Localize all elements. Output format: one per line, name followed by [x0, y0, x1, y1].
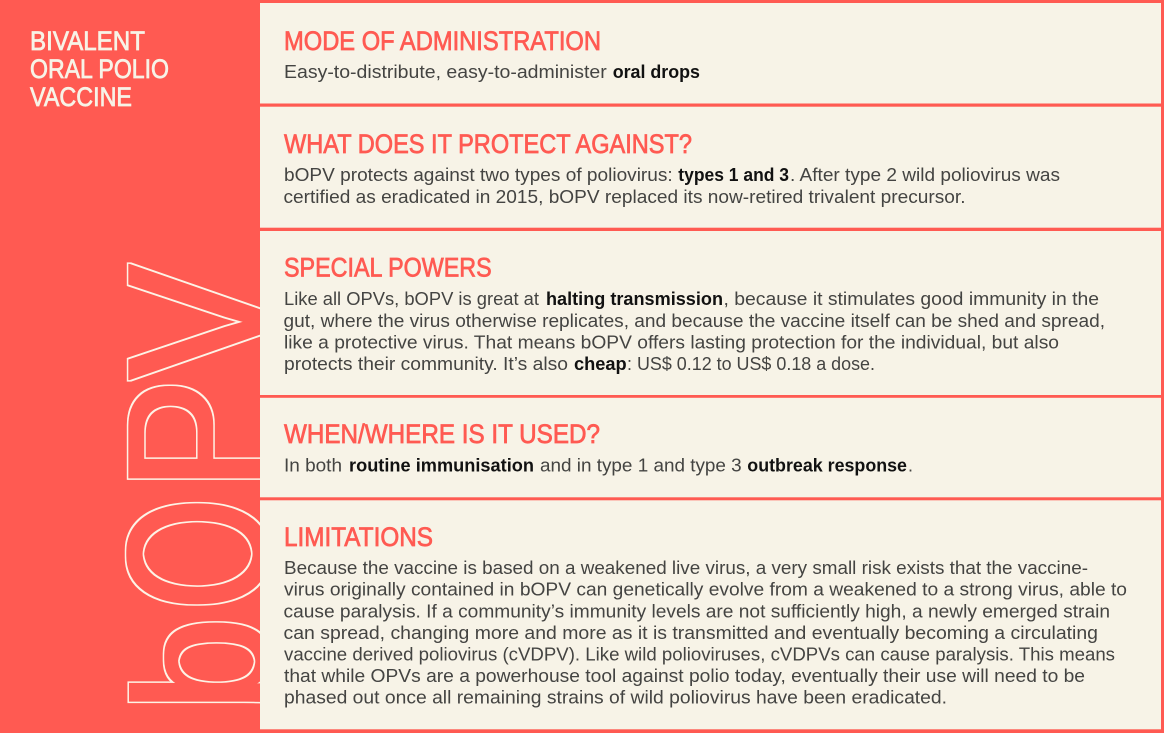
- heading: SPECIAL POWERS: [284, 253, 492, 283]
- text block: cheap: [574, 354, 627, 374]
- panel: mode of administration: [260, 3, 1161, 104]
- text block: Because the vaccine is based on a weakened live virus, a very small risk exists that the vaccine-: [284, 558, 1088, 578]
- text block: halting transmission: [546, 289, 723, 309]
- text block: cause paralysis. If a community’s immunity levels are not sufficiently high, a newly emerged strain: [284, 602, 1110, 622]
- text block: oral drops: [613, 62, 700, 82]
- text block: that while OPVs are a powerhouse tool against polio today, eventually their use will need to be: [284, 666, 1085, 686]
- large outlined rotated word: bOPV: b: [95, 618, 307, 711]
- panel: special powers: [260, 231, 1161, 395]
- text block: routine immunisation: [349, 456, 534, 476]
- title: bivalent oral polio vaccine: BIVALENT: [30, 26, 145, 56]
- text block: bOPV protects against two types of poliovirus:: [284, 165, 673, 185]
- text block: .: [908, 456, 913, 476]
- text block: : US$ 0.12 to US$ 0.18 a dose.: [627, 354, 875, 374]
- text block: outbreak response: [747, 456, 907, 476]
- text block: can spread, changing more and more as it is transmitted and eventually becoming a circulating: [284, 623, 1098, 643]
- heading: WHAT DOES IT PROTECT AGAINST?: [284, 129, 692, 159]
- large outlined rotated word: bOPV: P: [86, 379, 309, 490]
- text block: like a protective virus. That means bOPV offers lasting protection for the individual, but also: [284, 332, 1059, 352]
- text block: vaccine derived poliovirus (cVDPV). Like wild polioviruses, cVDPVs can cause paralysis. This means: [284, 645, 1115, 665]
- text block: [284, 558, 1127, 708]
- title: bivalent oral polio vaccine: ORAL POLIO: [30, 54, 169, 84]
- text block: and in type 1 and type 3: [540, 456, 742, 476]
- large outlined rotated word: bOPV: [85, 265, 309, 711]
- text block: gut, where the virus otherwise replicates, and because the vaccine itself can be shed and spread,: [284, 311, 1105, 331]
- text block: [284, 289, 1105, 374]
- heading: WHEN/WHERE IS IT USED?: [284, 419, 600, 449]
- panel: when/where is it used: [260, 398, 1161, 497]
- text block: types 1 and 3: [678, 165, 789, 185]
- text block: phased out once all remaining strains of wild poliovirus have been eradicated.: [284, 688, 947, 708]
- text block: virus originally contained in bOPV can genetically evolve from a weakened to a strong virus, able to: [284, 580, 1127, 600]
- heading: MODE OF ADMINISTRATION: [284, 26, 601, 56]
- text block: protects their community. It’s also: [284, 354, 568, 374]
- text block: Easy-to-distribute, easy-to-administer: [284, 62, 607, 82]
- heading: LIMITATIONS: [284, 522, 433, 552]
- text block: . After type 2 wild poliovirus was: [790, 165, 1060, 185]
- panel: what does it protect against: [260, 107, 1161, 228]
- title: bivalent oral polio vaccine: [30, 26, 169, 112]
- large outlined rotated word: bOPV: V: [87, 265, 309, 379]
- text block: Like all OPVs, bOPV is great at: [284, 289, 539, 309]
- panel: limitations: [260, 500, 1161, 729]
- text block: , because it stimulates good immunity in the: [724, 289, 1099, 309]
- title: bivalent oral polio vaccine: VACCINE: [30, 82, 132, 112]
- text block: [284, 165, 1060, 207]
- text block: In both: [284, 456, 342, 476]
- text block: certified as eradicated in 2015, bOPV replaced its now-retired trivalent precursor.: [284, 187, 966, 207]
- large outlined rotated word: bOPV: O: [85, 499, 309, 609]
